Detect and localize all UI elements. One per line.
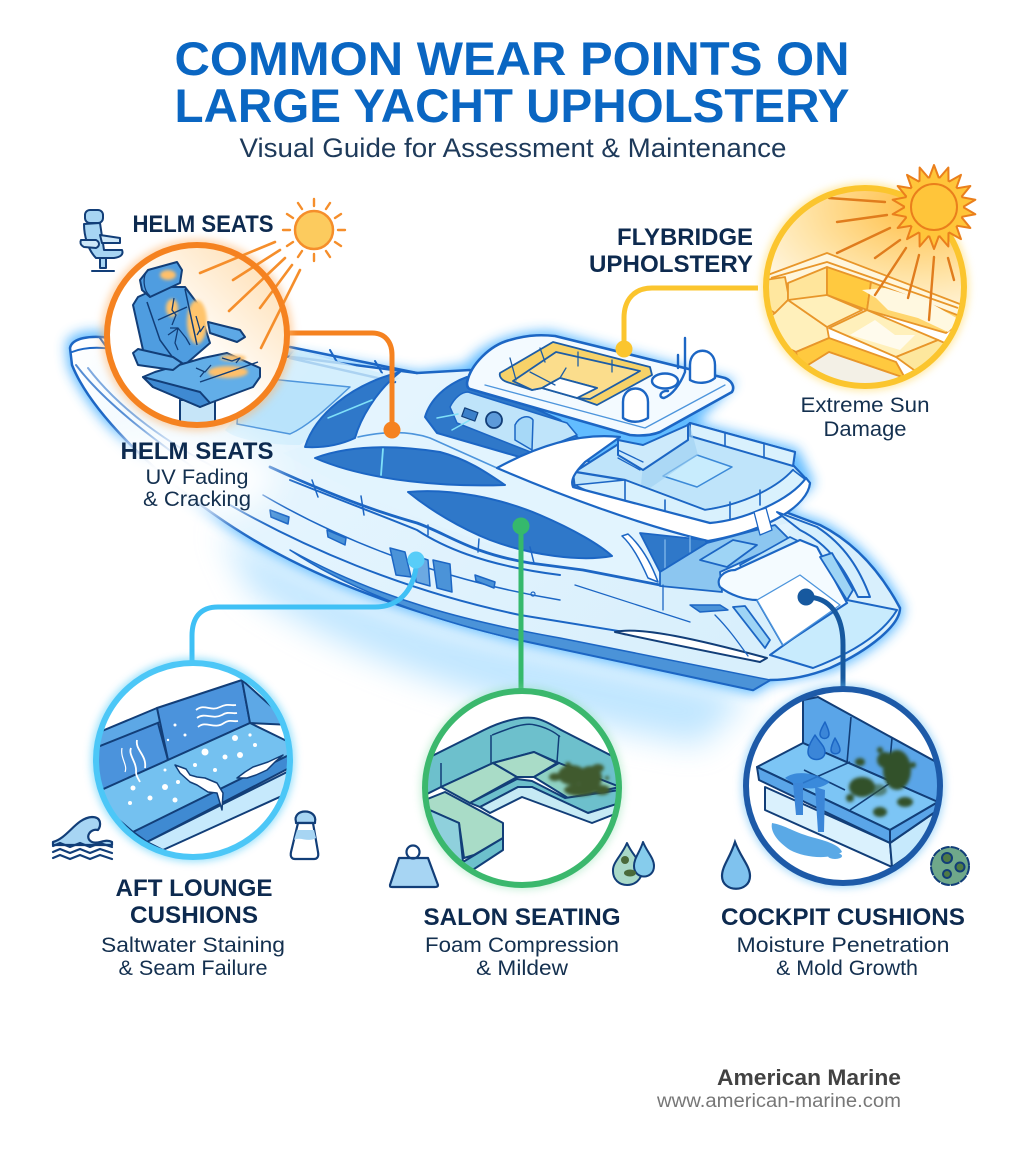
aft upper deck [573,423,810,540]
label: cockpit cushions: Moisture Penetration [736,934,950,957]
label: helm seats: & Cracking [143,488,251,511]
hull haze [220,525,750,745]
stern steps [733,553,853,648]
brand footer [656,1065,901,1112]
foredeck side [225,350,400,445]
tear [175,765,223,810]
connector: helm seats [288,333,392,430]
helm chair [133,262,260,430]
side deck arc [777,512,870,597]
icon: mold [931,847,969,885]
label: cockpit cushions: COCKPIT CUSHIONS [721,904,965,931]
label: salon seating: & Mildew [476,957,569,980]
yacht glow [70,335,900,690]
label: helm seats: UV Fading [146,466,248,489]
windshield sweep [305,372,400,447]
icon: mildew drops [613,842,654,885]
label: flybridge upholstery: FLYBRIDGE [617,224,753,251]
title [174,32,850,132]
connector: aft lounge [192,568,416,664]
sun rays in circle [200,242,300,348]
title: COMMON WEAR POINTS ON [174,32,850,85]
salt specks [128,724,257,805]
heading: helm seats top: HELM SEATS [132,211,274,238]
panel: flybridge upholstery [761,165,976,395]
house top line [358,433,497,468]
label: salon seating: SALON SEATING [424,904,620,931]
window two [408,491,612,558]
bow rails [72,338,417,480]
label: aft lounge cushions: AFT LOUNGE [116,875,272,902]
radar domes [623,338,715,422]
hull portholes and vents [270,510,495,592]
panel: salon seating [420,686,624,890]
connector: flybridge [624,288,758,348]
keel band [290,550,770,690]
label: flybridge upholstery [589,224,753,278]
label: salon seating [424,904,620,980]
label: aft lounge cushions: Saltwater Staining [101,934,285,957]
bow fade [75,436,275,520]
connector: cockpit [806,597,843,692]
label: aft lounge cushions [101,875,285,980]
flybridge helm [425,377,580,458]
sofa [769,252,960,383]
main deck house [283,375,800,590]
panel: cockpit cushions [741,684,945,888]
label: extreme sun damage: Extreme Sun [800,394,930,417]
deck overhang [497,436,810,541]
brand footer: American Marine [717,1065,901,1090]
side rail lines [230,467,735,650]
icon: sun [283,199,345,261]
foredeck pad [237,376,350,434]
connector dots [384,340,814,606]
icon: salt shaker [291,812,318,859]
label: helm seats: HELM SEATS [120,438,274,465]
connector: salon [518,525,524,692]
label: extreme sun damage [800,394,930,441]
icon: weight [390,846,438,887]
brand footer: www.american-marine.com [656,1091,901,1112]
label: aft lounge cushions: CUSHIONS [130,902,258,929]
label: flybridge upholstery: UPHOLSTERY [589,251,753,278]
hull body [70,337,900,690]
flybridge roof [467,335,733,436]
icon: helm chair [80,210,123,271]
label: helm seats [120,438,274,511]
icon: water drop [722,842,750,889]
title: LARGE YACHT UPHOLSTERY [174,79,850,132]
label: extreme sun damage: Damage [824,418,906,441]
flybridge seating [500,342,652,405]
stern transom [719,540,847,645]
stern quarter [575,585,767,662]
label: cockpit cushions: & Mold Growth [776,957,918,980]
yacht illustration [70,335,900,745]
label: aft lounge cushions: & Seam Failure [118,957,268,980]
aft cockpit [622,508,800,592]
swim platform [770,600,897,668]
label: salon seating: Foam Compression [425,934,619,957]
icon: star sun [892,165,976,249]
window one [315,447,505,485]
icon: wave [53,817,112,859]
panel: helm seats [101,239,300,431]
label: cockpit cushions [721,904,965,980]
subtitle: Visual Guide for Assessment & Maintenance [240,133,786,163]
panel: aft lounge cushions [90,658,295,862]
